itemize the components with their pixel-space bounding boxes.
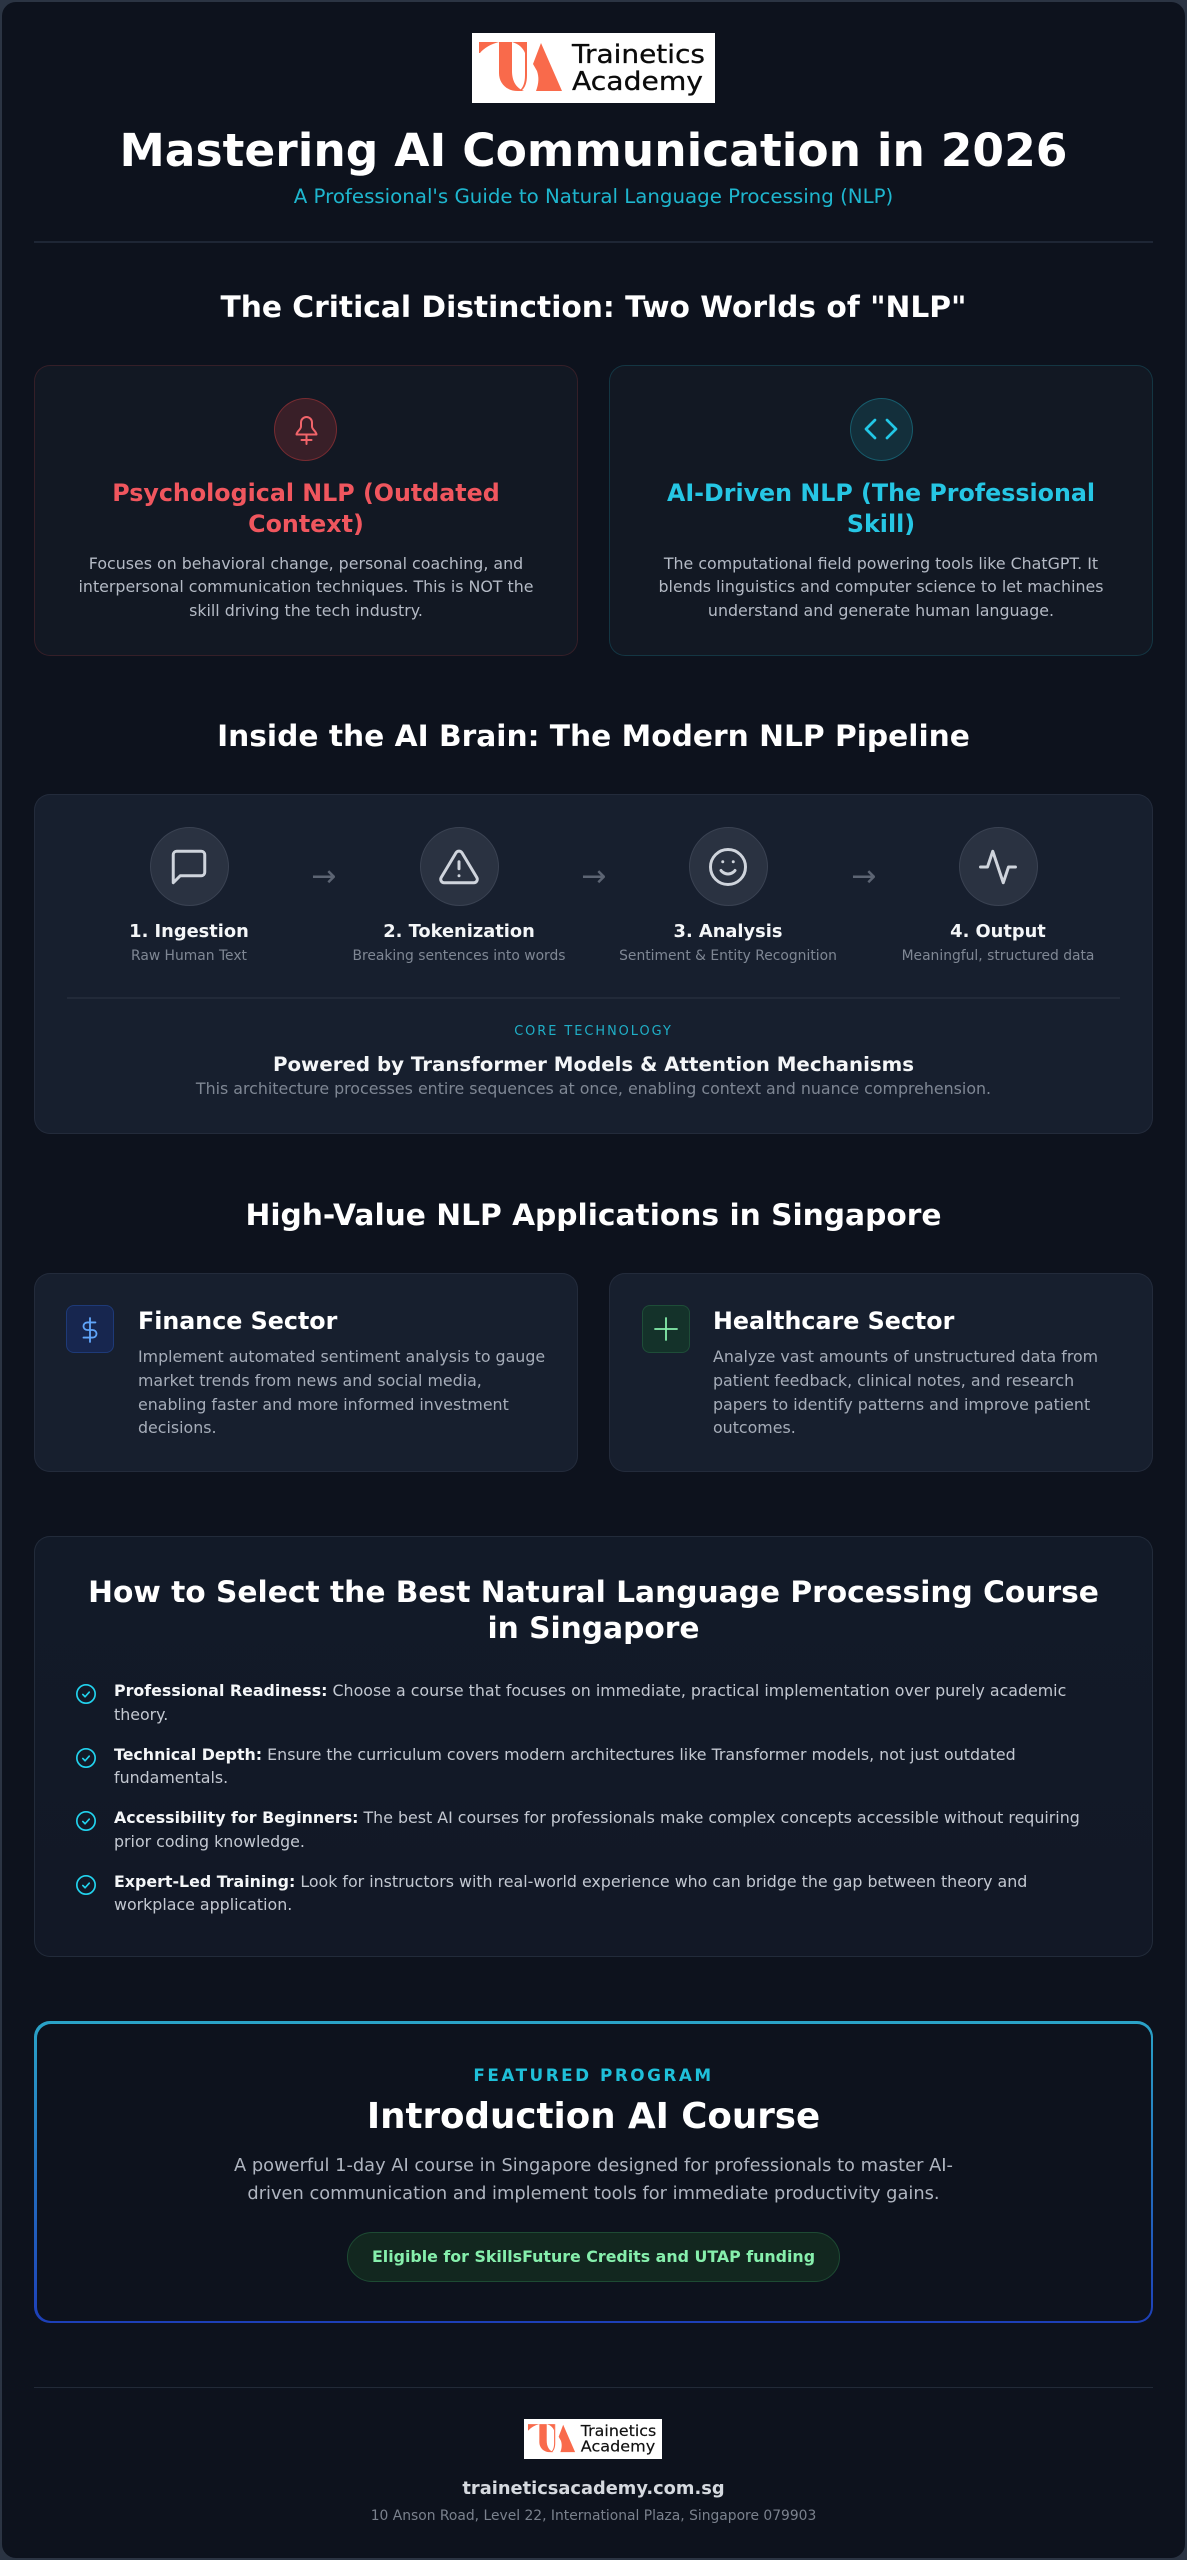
card text: The computational field powering tools like ChatGPT. It blends linguistics and computer science to let machines understand and generate human language. bbox=[658, 554, 1104, 620]
arrow: → bbox=[851, 859, 877, 894]
icon: smile bbox=[688, 827, 768, 906]
heading: applications: High-Value NLP Applications in Singapore bbox=[245, 1198, 942, 1233]
text: Expert-Led Training: Look for instructors with real-world experience who can bridge the gap between theory and workplace application. bbox=[114, 1872, 1027, 1914]
icon: dollar bbox=[66, 1305, 114, 1352]
description: driven communication and implement tools for immediate productivity gains. bbox=[247, 2183, 940, 2204]
text: Accessibility for Beginners: The best AI courses for professionals make complex concepts accessible without requiring prior coding knowledge. bbox=[114, 1808, 1080, 1851]
icon: check bbox=[76, 1684, 96, 1704]
label: 2. Tokenization bbox=[383, 920, 535, 942]
arrow: → bbox=[581, 859, 607, 894]
core technology label: CORE TECHNOLOGY bbox=[514, 1024, 673, 1038]
heading: pipeline: Inside the AI Brain: The Modern NLP Pipeline bbox=[217, 719, 970, 754]
footer logo: Trainetics bbox=[580, 2423, 656, 2440]
panel: healthcare bbox=[609, 1273, 1153, 1472]
step 2: tokenization bbox=[352, 827, 566, 964]
logo: Trainetics Academy bbox=[472, 33, 715, 103]
criterion: expert-led bbox=[76, 1872, 1027, 1914]
description: Sentiment & Entity Recognition bbox=[619, 948, 837, 964]
label: 4. Output bbox=[950, 920, 1046, 942]
icon: message bbox=[150, 827, 229, 906]
funding badge bbox=[347, 2232, 840, 2282]
footer logo: Academy bbox=[581, 2439, 656, 2456]
text: Technical Depth: Ensure the curriculum covers modern architectures like Transformer models, not just outdated fundamentals. bbox=[114, 1744, 1016, 1787]
description bbox=[234, 2155, 953, 2204]
step 4: output bbox=[902, 827, 1094, 964]
card title: Psychological NLP (Outdated Context) bbox=[112, 478, 500, 538]
criterion: accessibility bbox=[76, 1808, 1080, 1851]
website: traineticsacademy.com.sg bbox=[462, 2478, 725, 2499]
arrow: → bbox=[311, 859, 337, 894]
card title: AI-Driven NLP (The Professional Skill) bbox=[667, 478, 1095, 538]
heading: the critical distinction: The Critical Distinction: Two Worlds of "NLP" bbox=[220, 290, 967, 325]
icon: red bell bbox=[274, 398, 337, 461]
icon: check bbox=[76, 1748, 96, 1768]
title: Mastering AI Communication in 2026 bbox=[120, 124, 1067, 177]
subtitle: A Professional's Guide to Natural Language Processing (NLP) bbox=[294, 185, 893, 208]
icon: check bbox=[76, 1875, 96, 1895]
icon: check bbox=[76, 1811, 96, 1831]
step 3: analysis bbox=[619, 827, 837, 964]
icon: triangle bbox=[420, 827, 499, 906]
panel: psychological NLP bbox=[34, 365, 578, 656]
panel: AI-driven NLP bbox=[609, 365, 1153, 656]
heading: How to Select the Best Natural Language Processing Course in Singapore bbox=[88, 1575, 1099, 1646]
label: FEATURED PROGRAM bbox=[473, 2064, 714, 2084]
card text: Focuses on behavioral change, personal coaching, and interpersonal communication techniques. This is NOT the skill driving the tech industry. bbox=[79, 554, 533, 620]
description: A powerful 1-day AI course in Singapore designed for professionals to master AI- bbox=[234, 2155, 953, 2176]
title: Finance Sector bbox=[138, 1307, 337, 1335]
description: Breaking sentences into words bbox=[352, 948, 566, 964]
step 1: ingestion bbox=[129, 827, 249, 964]
text: Implement automated sentiment analysis to gauge market trends from news and social media, enabling faster and more informed investment decisions. bbox=[138, 1347, 545, 1437]
panel: finance bbox=[34, 1273, 578, 1472]
address: 10 Anson Road, Level 22, International Plaza, Singapore 079903 bbox=[371, 2508, 816, 2524]
panel: NLP pipeline bbox=[34, 794, 1153, 1134]
text: Professional Readiness: Choose a course that focuses on immediate, practical implementation over purely academic theory. bbox=[114, 1681, 1066, 1724]
description: Meaningful, structured data bbox=[902, 948, 1094, 964]
funding badge: Eligible for SkillsFuture Credits and UTAP funding bbox=[372, 2247, 815, 2266]
icon: plus bbox=[642, 1305, 690, 1352]
panel: featured program bbox=[34, 2021, 1153, 2323]
icon: code brackets bbox=[850, 398, 913, 461]
title: Healthcare Sector bbox=[713, 1307, 954, 1335]
text: Analyze vast amounts of unstructured data from patient feedback, clinical notes, and research papers to identify patterns and improve patient outcomes. bbox=[713, 1347, 1098, 1437]
label: 3. Analysis bbox=[674, 920, 782, 942]
footer logo bbox=[524, 2419, 662, 2459]
course title: Introduction AI Course bbox=[367, 2096, 820, 2137]
label: 1. Ingestion bbox=[129, 920, 249, 942]
core technology heading: Powered by Transformer Models & Attention Mechanisms bbox=[273, 1052, 914, 1076]
logo: Trainetics Academy: Academy bbox=[572, 67, 703, 97]
panel: how to select bbox=[34, 1536, 1153, 1957]
logo: Trainetics Academy: Trainetics bbox=[571, 40, 705, 70]
icon: activity bbox=[958, 827, 1038, 906]
criterion: professional readiness bbox=[76, 1681, 1066, 1724]
core technology text: This architecture processes entire sequences at once, enabling context and nuance comprehension. bbox=[196, 1079, 991, 1098]
criterion: technical depth bbox=[76, 1744, 1016, 1787]
description: Raw Human Text bbox=[131, 948, 247, 964]
